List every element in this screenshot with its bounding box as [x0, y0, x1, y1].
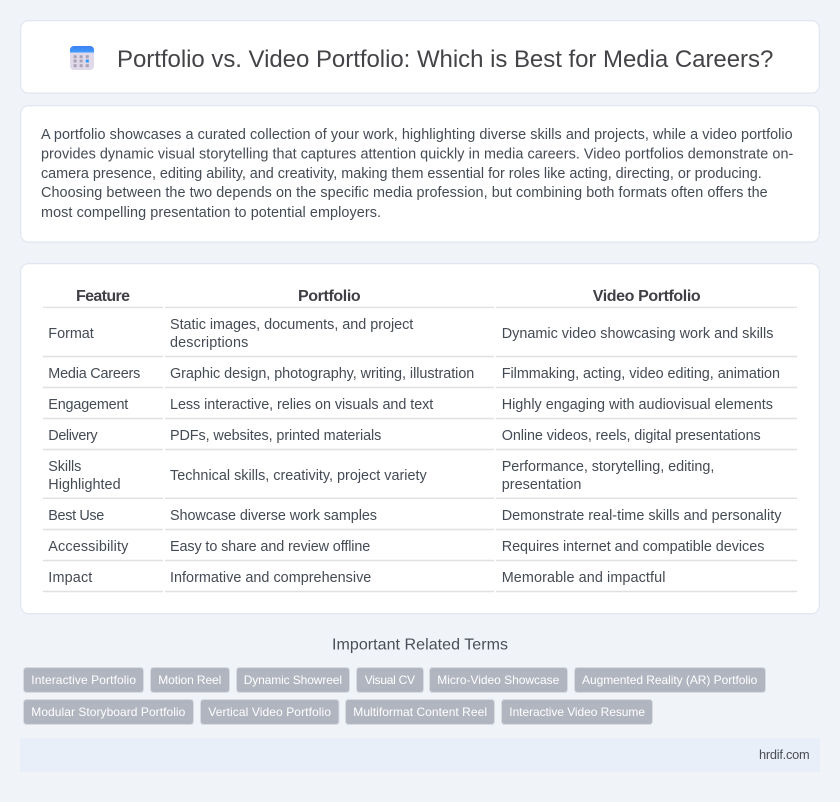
row: delivery: Online videos, reels, digital presentations: [502, 428, 761, 444]
tags: related terms: [24, 668, 766, 724]
row: media careers: Graphic design, photography, writing, illustration: [170, 366, 474, 382]
tags: related terms: Visual CV: [365, 673, 415, 687]
heading: important related terms: Important Related Terms: [332, 636, 508, 654]
row: media careers: Filmmaking, acting, video editing, animation: [502, 366, 780, 382]
row: media careers: [48, 366, 780, 382]
footer source text: hrdif.com: [759, 747, 810, 762]
tags: related terms: Micro-Video Showcase: [437, 673, 560, 687]
row: accessibility: Easy to share and review offline: [170, 539, 370, 555]
row: impact: Informative and comprehensive: [170, 570, 371, 586]
panel: title header: [21, 21, 819, 93]
footer bar: [20, 738, 820, 772]
row: skills highlighted: Technical skills, creativity, project variety: [170, 468, 427, 484]
tags: related terms: Dynamic Showreel: [244, 673, 342, 687]
table header row: [76, 288, 701, 305]
row: media careers: Media Careers: [48, 366, 140, 382]
row: skills highlighted: Skills: [48, 459, 81, 475]
tags: related terms: Vertical Video Portfolio: [208, 705, 331, 719]
row: best use: Best Use: [48, 508, 104, 524]
title: Portfolio vs. Video Portfolio: Which is Best for Media Careers?: [117, 46, 773, 73]
tags: related terms: Multiformat Content Reel: [353, 705, 487, 719]
row: accessibility: Accessibility: [48, 539, 129, 555]
tags: related terms: Motion Reel: [158, 673, 221, 687]
row: format: Static images, documents, and project: [170, 317, 413, 333]
row: delivery: [48, 428, 761, 444]
tags: related terms: Augmented Reality (AR) Portfolio: [582, 673, 758, 687]
row: best use: Demonstrate real-time skills and personality: [502, 508, 782, 524]
row: best use: Showcase diverse work samples: [170, 508, 377, 524]
row: skills highlighted: [48, 459, 714, 493]
row: best use: [48, 508, 782, 524]
tags: related terms: Interactive Portfolio: [31, 673, 136, 687]
table header row: Portfolio: [298, 288, 361, 305]
row: skills highlighted: Performance, storytelling, editing,: [502, 459, 714, 475]
row: delivery: Delivery: [48, 428, 98, 444]
row: impact: Impact: [48, 570, 92, 586]
row: engagement: [48, 397, 773, 413]
text block: intro: Choosing between the two depends on the specific media profession, but combining both formats often offers the: [41, 185, 768, 201]
row: format: Dynamic video showcasing work and skills: [502, 326, 773, 342]
text block: intro: A portfolio showcases a curated collection of your work, highlighting diverse skills and projects, while a video portfolio: [41, 127, 793, 143]
panel: intro paragraph: [21, 106, 819, 242]
row: engagement: Highly engaging with audiovisual elements: [502, 397, 773, 413]
text block: intro: most compelling presentation to potential employers.: [41, 205, 381, 221]
row: impact: Memorable and impactful: [502, 570, 665, 586]
text block: intro: provides dynamic visual storytelling that captures attention quickly in media careers. Video portfolios demonstrate on-: [41, 146, 794, 162]
row: delivery: PDFs, websites, printed materials: [170, 428, 381, 444]
row: format: [48, 317, 773, 351]
row: format: descriptions: [170, 335, 248, 351]
text block: intro: camera presence, editing ability, and creativity, making them essential for roles like acting, directing, or producing.: [41, 166, 762, 182]
tags: related terms: Interactive Video Resume: [509, 705, 645, 719]
icon: calendar: [70, 46, 94, 70]
row: accessibility: Requires internet and compatible devices: [502, 539, 764, 555]
row: engagement: Engagement: [48, 397, 128, 413]
row: accessibility: [48, 539, 764, 555]
row: engagement: Less interactive, relies on visuals and text: [170, 397, 433, 413]
row: skills highlighted: presentation: [502, 477, 581, 493]
table header row: Feature: [76, 288, 130, 305]
row: format: Format: [48, 326, 94, 342]
row: impact: [48, 570, 665, 586]
table header row: Video Portfolio: [593, 288, 701, 305]
panel: comparison table: [21, 264, 819, 614]
text block: intro: [41, 127, 794, 221]
row: skills highlighted: Highlighted: [48, 477, 121, 493]
tags: related terms: Modular Storyboard Portfolio: [31, 705, 186, 719]
